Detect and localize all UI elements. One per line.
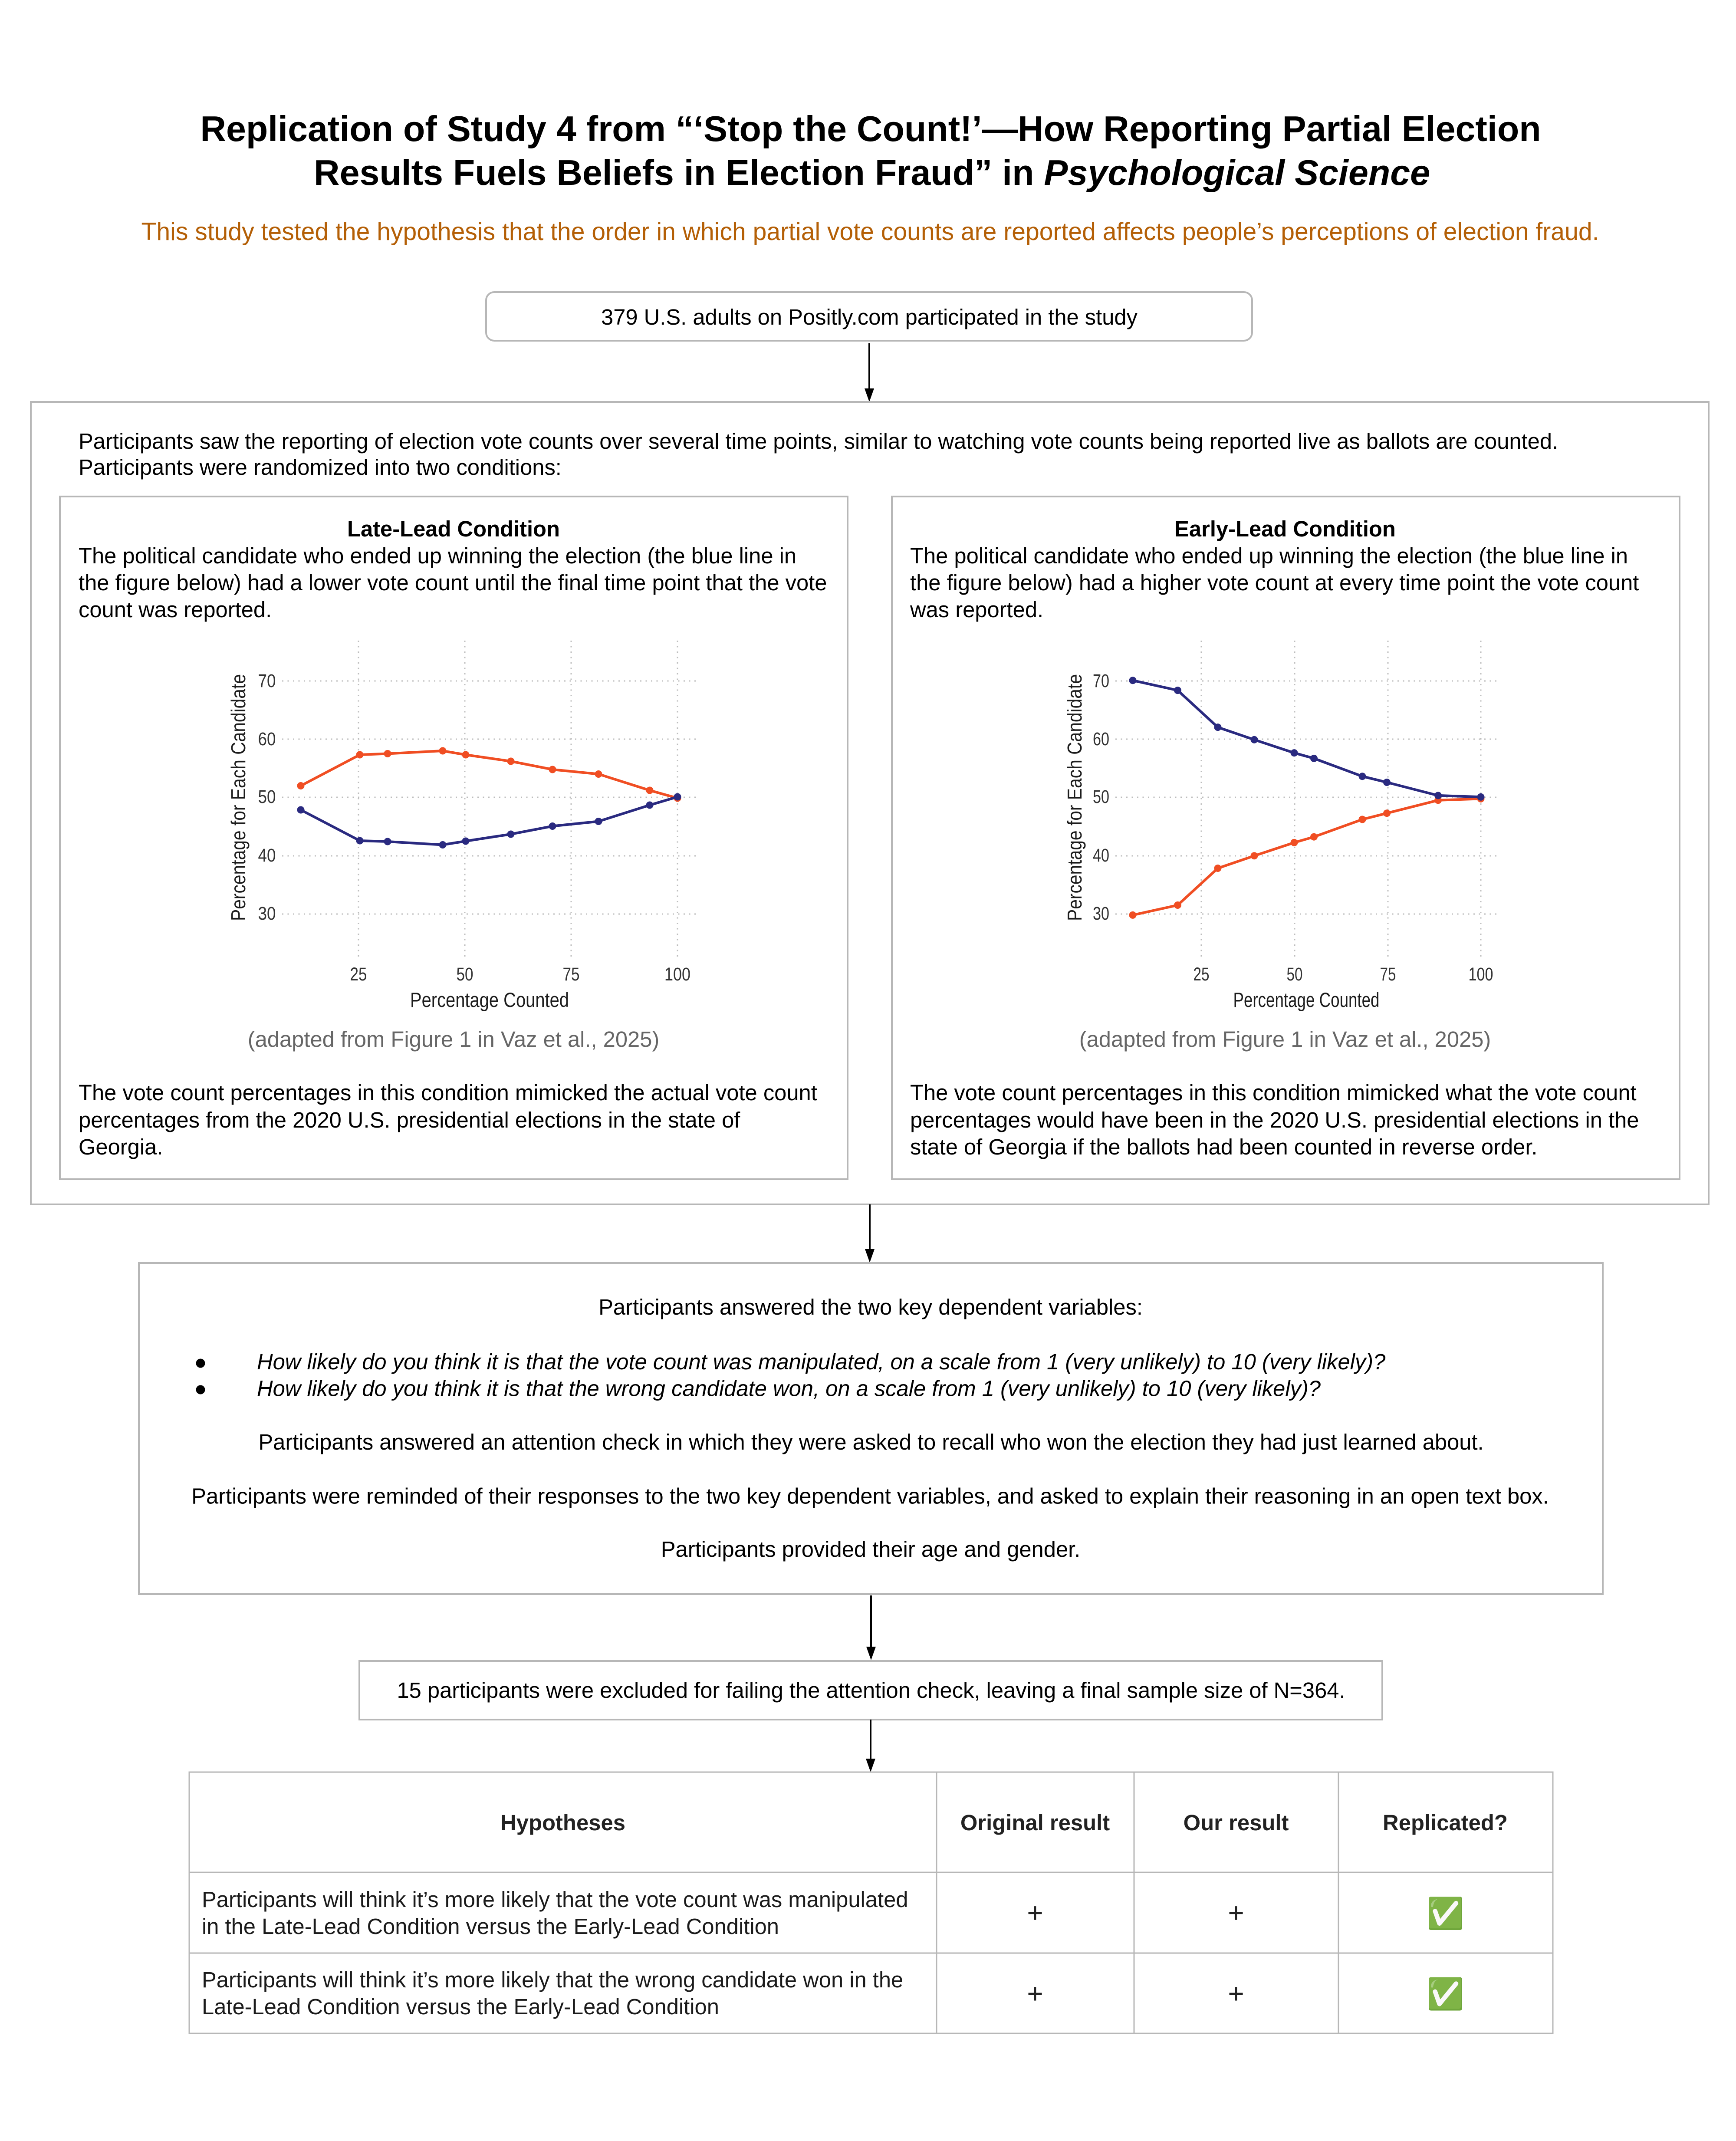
line chart: late-lead: 25 <box>350 964 367 985</box>
text: late-lead note: Georgia. <box>79 1135 163 1159</box>
table header: Hypotheses <box>500 1810 625 1835</box>
text: early-lead description: The political candidate who ended up winning the election (the blue line in <box>910 543 1628 568</box>
arrow: exclusions to results table <box>866 1720 875 1772</box>
line chart: late-lead: 50 <box>258 786 276 807</box>
text: early-lead note: percentages would have been in the 2020 U.S. presidential elections in the <box>910 1108 1639 1132</box>
line chart: late-lead: Percentage Counted <box>410 988 569 1011</box>
line chart: early-lead: Percentage for Each Candidate <box>1063 674 1086 921</box>
text: early-lead description: the figure below) had a higher vote count at every time point the vote count <box>910 570 1639 595</box>
text: late-lead note: The vote count percentages in this condition mimicked the actual vote count <box>79 1080 817 1105</box>
line chart: early-lead: 50 <box>1286 964 1303 985</box>
panel: dependent variables and procedure: Participants answered an attention check in which they were asked to recall who won the election they had just learned about. <box>258 1430 1484 1454</box>
line chart: early-lead: 30 <box>1093 903 1109 924</box>
intro text: Participants were randomized into two conditions: <box>79 455 562 480</box>
line chart: late-lead: 30 <box>258 903 276 924</box>
panel: randomization into conditions <box>31 402 1709 1204</box>
arrow: conditions to dependent variables <box>865 1204 875 1263</box>
text: late-lead description: count was reported. <box>79 597 272 622</box>
intro text: Participants saw the reporting of election vote counts over several time points, similar to watching vote counts being reported live as ballots are counted. <box>79 429 1558 454</box>
line chart: early-lead <box>1063 641 1498 1011</box>
text: late-lead description: the figure below) had a lower vote count until the final time point that the vote <box>79 570 827 595</box>
text: early-lead note: state of Georgia if the ballots had been counted in reverse order. <box>910 1135 1538 1159</box>
table row: wrong candidate won: + <box>1027 1978 1043 2009</box>
bullet list: key dependent variables: How likely do you think it is that the wrong candidate won, on a scale from 1 (very unlikely) to 10 (very likely)? <box>257 1376 1321 1401</box>
bullet list: key dependent variables: How likely do you think it is that the vote count was manipulated, on a scale from 1 (very unlikely) to 10 (very likely)? <box>257 1349 1386 1374</box>
box: exclusions and final sample: 15 participants were excluded for failing the attention check, leaving a final sample size of N=364. <box>397 1678 1345 1703</box>
caption: early-lead figure source: (adapted from Figure 1 in Vaz et al., 2025) <box>1079 1027 1491 1052</box>
table row: wrong candidate won <box>202 1967 1462 2019</box>
table row: vote count manipulated: Participants will think it’s more likely that the vote count was manipulated <box>202 1887 908 1912</box>
icon: green check mark <box>1429 1977 1462 2010</box>
table header: Replicated? <box>1383 1810 1508 1835</box>
table header: Original result <box>960 1810 1110 1835</box>
arrow: participants to conditions <box>865 343 874 402</box>
table row: wrong candidate won: + <box>1228 1978 1244 2009</box>
title <box>200 109 1541 193</box>
table: results <box>189 1772 1553 2033</box>
line chart: early-lead: 60 <box>1093 729 1109 750</box>
panel: dependent variables and procedure <box>139 1263 1603 1594</box>
line chart: early-lead: Percentage Counted <box>1233 988 1379 1011</box>
line chart: early-lead: 40 <box>1093 845 1109 866</box>
line chart: late-lead: 40 <box>258 845 276 866</box>
table header <box>500 1810 1508 1835</box>
title: Results Fuels Beliefs in Election Fraud” in Psychological Science <box>314 153 1430 193</box>
title: Replication of Study 4 from “‘Stop the Count!’—How Reporting Partial Election <box>200 109 1541 149</box>
caption: late-lead figure source: (adapted from Figure 1 in Vaz et al., 2025) <box>248 1027 659 1052</box>
arrow: procedure to exclusions <box>866 1595 876 1660</box>
line chart: early-lead: 50 <box>1093 786 1109 807</box>
table header: Our result <box>1184 1810 1289 1835</box>
table row: wrong candidate won: Participants will think it’s more likely that the wrong candidate won in the <box>202 1967 903 1992</box>
table row: wrong candidate won: Late-Lead Condition versus the Early-Lead Condition <box>202 1994 719 2019</box>
panel: dependent variables and procedure: Participants provided their age and gender. <box>661 1537 1080 1562</box>
intro text <box>79 429 1558 480</box>
icon: green check mark <box>1429 1897 1462 1930</box>
panel: early-lead condition <box>892 497 1680 1179</box>
bullet list: key dependent variables <box>196 1349 1386 1401</box>
panel: dependent variables and procedure: Participants answered the two key dependent variables: <box>598 1295 1143 1319</box>
line chart: late-lead: Percentage for Each Candidate <box>227 674 250 921</box>
text: late-lead description: The political candidate who ended up winning the election (the blue line in <box>79 543 796 568</box>
line chart: early-lead: 70 <box>1093 671 1109 691</box>
box: participants <box>486 292 1252 341</box>
box: exclusions and final sample <box>359 1661 1382 1720</box>
line chart: late-lead: 50 <box>457 964 473 985</box>
box: participants: 379 U.S. adults on Positly.com participated in the study <box>601 305 1138 329</box>
text: early-lead note <box>910 1080 1639 1159</box>
line chart: late-lead: 70 <box>258 671 276 691</box>
panel: dependent variables and procedure: Participants were reminded of their responses to the two key dependent variables, and asked to explain their reasoning in an open text box. <box>191 1483 1549 1509</box>
text: late-lead note <box>79 1080 817 1159</box>
text: early-lead description <box>910 543 1639 622</box>
line chart: late-lead <box>227 641 696 1011</box>
text: late-lead note: percentages from the 2020 U.S. presidential elections in the state of <box>79 1108 740 1132</box>
table row: vote count manipulated: + <box>1228 1897 1244 1928</box>
line chart: late-lead: 75 <box>562 964 580 985</box>
line chart: early-lead: 25 <box>1194 964 1209 985</box>
line chart: late-lead: 100 <box>664 964 690 985</box>
text: early-lead description: was reported. <box>910 597 1043 622</box>
text: late-lead description <box>79 543 827 622</box>
line chart: early-lead: 100 <box>1469 964 1493 985</box>
table row: vote count manipulated: + <box>1027 1897 1043 1928</box>
line chart: early-lead: 75 <box>1380 964 1396 985</box>
table row: vote count manipulated: in the Late-Lead Condition versus the Early-Lead Condition <box>202 1914 779 1939</box>
heading: late-lead condition: Late-Lead Condition <box>347 516 560 541</box>
heading: early-lead condition: Early-Lead Condition <box>1174 516 1396 541</box>
text: early-lead note: The vote count percentages in this condition mimicked what the vote count <box>910 1080 1637 1105</box>
table row: vote count manipulated <box>202 1887 1462 1939</box>
panel: late-lead condition <box>60 497 848 1179</box>
line chart: late-lead: 60 <box>258 729 276 750</box>
subtitle: study hypothesis: This study tested the hypothesis that the order in which partial vote counts are reported affects people’s perceptions of election fraud. <box>141 218 1599 246</box>
